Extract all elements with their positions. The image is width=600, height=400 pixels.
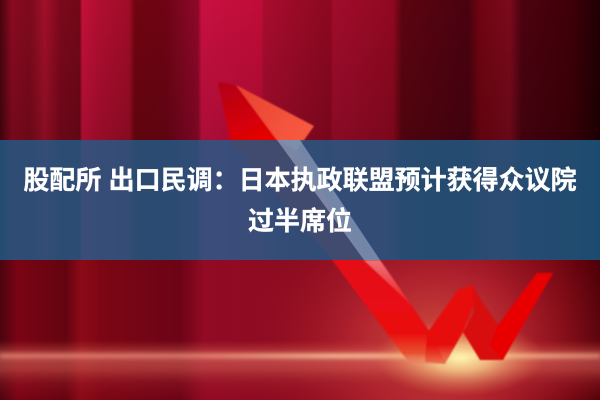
arrow shaft front face — [218, 82, 364, 260]
icon: rising arrow and zigzag line — [218, 82, 553, 364]
background: red stripes upper — [0, 0, 600, 260]
title — [23, 165, 577, 236]
arrow head light face — [236, 85, 314, 150]
zigzag right up stroke — [490, 273, 553, 360]
background: red stripes lower with glow — [0, 260, 600, 400]
title: 股配所 出口民调：日本执政联盟预计获得众议院 — [23, 165, 577, 195]
arrow seen through banner — [277, 140, 380, 260]
banner overlay — [0, 140, 600, 260]
shaft lower part — [332, 260, 446, 364]
title: 过半席位 — [248, 206, 352, 236]
zigzag middle up stroke — [425, 285, 478, 364]
zigzag middle down stroke — [463, 287, 515, 360]
arrow shaft light side — [364, 260, 412, 306]
